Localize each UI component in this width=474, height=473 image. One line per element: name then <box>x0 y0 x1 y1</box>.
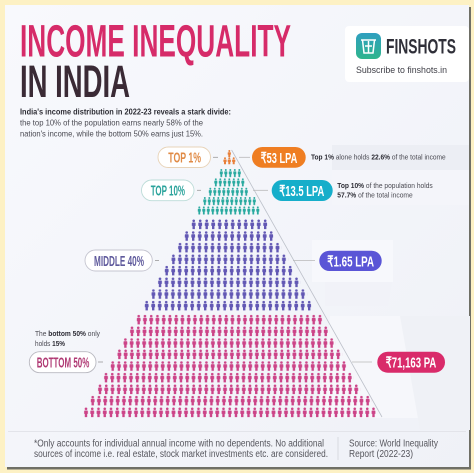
label: middle 40% <box>85 250 152 271</box>
footnote <box>34 438 328 460</box>
footnote: sources of income i.e. real estate, stock market investments etc. are considered. <box>34 449 328 460</box>
intro text: India's income distribution in 2022-23 reveals a stark divide: <box>20 106 231 116</box>
note: top 10%: Top 10% of the population holds <box>337 181 433 190</box>
background watermark logo <box>312 145 470 430</box>
label: top 1% <box>158 147 210 168</box>
note: top 10% <box>337 181 433 200</box>
footer divider <box>337 437 339 460</box>
title <box>20 16 291 107</box>
intro text: the top 10% of the population earns nearly 58% of the <box>20 118 203 128</box>
pyramid: top 10% figures <box>198 169 260 215</box>
intro text: nation's income, while the bottom 50% earns just 15%. <box>20 128 203 138</box>
value: middle 40% <box>319 251 382 271</box>
arrow: bottom 50% left <box>98 361 103 363</box>
label: top 1%: TOP 1% <box>168 150 201 166</box>
value: top 1% <box>252 147 306 168</box>
pyramid edge line <box>232 150 382 417</box>
label: bottom 50%: BOTTOM 50% <box>37 354 89 372</box>
icon: finshots logo <box>356 33 381 59</box>
pyramid: middle 40% figures <box>144 220 314 311</box>
note: top 10%: 57.7% of the total income <box>337 190 413 200</box>
label: bottom 50% <box>29 352 96 373</box>
arrow: top 1% left <box>213 156 218 158</box>
arrow: middle 40% right <box>293 260 315 262</box>
source <box>349 438 438 460</box>
pyramid: top 1% figures <box>223 150 235 164</box>
footnote: *Only accounts for individual annual income with no dependents. No additional <box>34 438 324 450</box>
label: top 10% <box>142 180 194 201</box>
value: middle 40%: ₹1.65 LPA <box>327 253 374 270</box>
pyramid: bottom 50% figures <box>84 315 378 418</box>
note: top 1%: Top 1% alone holds 22.6% of the total income <box>311 153 446 162</box>
value: bottom 50% <box>377 352 445 373</box>
label: top 10%: TOP 10% <box>151 182 185 200</box>
title: IN INDIA <box>20 56 130 107</box>
intro text <box>20 106 231 138</box>
arrow: middle 40% left <box>155 260 159 262</box>
value: bottom 50%: ₹71,163 PA <box>386 354 436 372</box>
arrow: top 1% right <box>239 156 250 158</box>
note: bottom 50%: The bottom 50% only <box>35 329 100 338</box>
value: top 1%: ₹53 LPA <box>261 150 297 167</box>
finshots card <box>345 26 469 82</box>
source: Report (2022-23) <box>349 449 413 460</box>
footer rule <box>8 430 466 432</box>
arrow: top 10% right <box>253 189 268 191</box>
label: middle 40%: MIDDLE 40% <box>94 253 144 270</box>
note: bottom 50%: holds 15% <box>35 339 65 348</box>
subscribe text: Subscribe to finshots.in <box>356 65 447 76</box>
arrow: top 10% left <box>197 189 201 191</box>
arrow: bottom 50% right <box>352 361 372 363</box>
value: top 10% <box>272 180 333 201</box>
value: top 10%: ₹13.5 LPA <box>279 183 324 200</box>
note: bottom 50% <box>35 329 100 348</box>
source: Source: World Inequality <box>349 438 438 450</box>
